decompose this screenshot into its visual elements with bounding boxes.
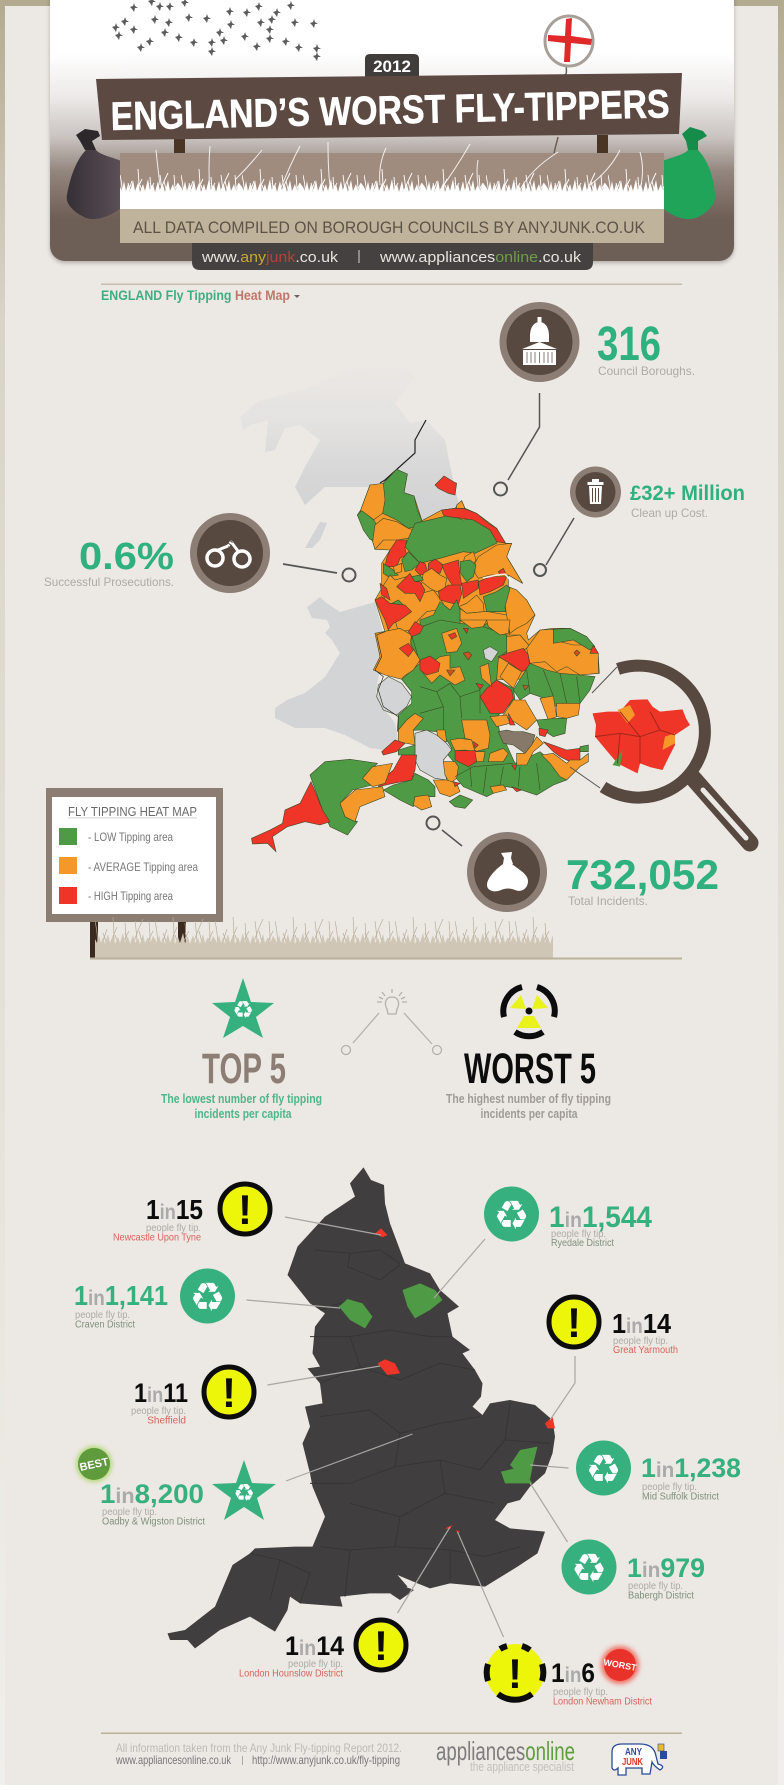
badge: best: BEST [79, 1456, 110, 1474]
callout: London Newham District: London Newham District [553, 1696, 652, 1708]
badge: worst [601, 1646, 639, 1684]
legend posts [90, 922, 186, 958]
stat: clean up cost: £32+ Million [630, 482, 745, 505]
callout: Mid Suffolk District: 1in1,238 [641, 1453, 741, 1483]
top 5 heading: incidents per capita [194, 1106, 292, 1121]
legend board: FLY TIPPING HEAT MAP [68, 804, 197, 819]
stat: total incidents: Total Incidents. [568, 894, 648, 908]
top 5 heading: TOP 5 [202, 1045, 286, 1093]
logo: appliancesonline: appliancesonline [436, 1736, 575, 1766]
callout: Mid Suffolk District [576, 1440, 741, 1502]
dark map of England [168, 1167, 555, 1648]
bag: black [67, 129, 124, 219]
lightbulb connector [342, 989, 442, 1054]
callout: London Hounslow District: people fly tip. [288, 1659, 343, 1670]
callout: Newcastle Upon Tyne: people fly tip. [146, 1223, 201, 1234]
icon: warning [356, 1620, 406, 1670]
stat: successful prosecutions: Successful Prosecutions. [44, 575, 174, 589]
icon: rubbish sack [487, 852, 528, 891]
grass panel [120, 142, 664, 209]
website bar: www.anyjunk.co.uk [201, 249, 339, 266]
callout: Craven District: Craven District [75, 1320, 135, 1330]
callout: Babergh District [562, 1540, 705, 1602]
callout: London Hounslow District: London Hounslow District [239, 1668, 343, 1680]
grass strip and divider [90, 915, 682, 960]
callout: Great Yarmouth: people fly tip. [613, 1336, 668, 1347]
stat: clean up cost [534, 466, 745, 576]
icon: radiation symbol [503, 987, 555, 1036]
icon: recycling: ♻ [190, 1275, 225, 1321]
highlighted districts [339, 1228, 555, 1533]
callout: Oadby and Wigston District [76, 1446, 276, 1528]
callout: Oadby and Wigston District: 1in8,200 [100, 1479, 204, 1509]
stat: clean up cost: Clean up Cost. [631, 506, 708, 520]
callout: Oadby and Wigston District: Oadby & Wigston District [102, 1516, 205, 1528]
magnifying glass with London detail [570, 666, 750, 843]
callout: Craven District: people fly tip. [75, 1310, 130, 1321]
callout: London Newham District [486, 1644, 652, 1708]
logo: any junk elephant [612, 1744, 667, 1775]
icon: bin [588, 479, 604, 504]
stat: 316 council boroughs: 316 [597, 318, 661, 371]
logo: appliancesonline: the appliance specialist [470, 1759, 574, 1774]
callout: Newcastle Upon Tyne: Newcastle Upon Tyne [113, 1232, 201, 1244]
callout: London Hounslow District [239, 1620, 406, 1680]
top 5 heading: The lowest number of fly tipping [161, 1091, 322, 1106]
callout: Ryedale District: people fly tip. [551, 1229, 606, 1240]
callout: London Hounslow District: 1in14 [285, 1631, 344, 1661]
website bar: www.appliances online.co.uk [379, 249, 582, 266]
year tab: 2012 [373, 57, 411, 76]
icon: warning with radiation ring: ! [508, 1650, 522, 1697]
bag: green [660, 127, 715, 219]
icon: star: ♻ [233, 1479, 255, 1507]
callout: Craven District [74, 1268, 235, 1330]
icon: warning: ! [567, 1299, 581, 1346]
callout: Mid Suffolk District: people fly tip. [642, 1482, 697, 1493]
callout: London Newham District: 1in6 [551, 1658, 595, 1688]
tagline band [120, 209, 664, 243]
map: south west England districts [252, 759, 392, 852]
map: midlands and southern England districts [373, 620, 598, 810]
icon: recycling [180, 1268, 235, 1324]
icon: warning [220, 1184, 270, 1234]
icon: handcuffs [207, 541, 250, 567]
icon: domed council building [522, 317, 557, 365]
stat: 316 council boroughs: Council Boroughs. [598, 364, 695, 378]
icon: warning: ! [374, 1622, 388, 1669]
map: grey surrounding nations [240, 363, 470, 750]
icon: warning: ! [238, 1186, 252, 1233]
callout: London Newham District: people fly tip. [553, 1687, 608, 1698]
footer source note: All information taken from the Any Junk Fly-tipping Report 2012. [116, 1741, 402, 1755]
icon: green star: ♻ [232, 996, 254, 1024]
logo: any junk elephant: ANY [625, 1747, 642, 1758]
map: white Humber estuary [483, 574, 512, 582]
icon: recycling: ♻ [586, 1447, 621, 1493]
icon: green star [212, 978, 274, 1038]
callout: Craven District: 1in1,141 [74, 1280, 168, 1311]
badge: worst: WORST [603, 1657, 638, 1673]
icon: recycling [484, 1186, 539, 1242]
callout: Ryedale District: Ryedale District [551, 1238, 614, 1249]
stat: 316 council boroughs [494, 302, 695, 496]
icon: star [212, 1460, 276, 1520]
heat map of Great Britain [240, 363, 599, 852]
stat: total incidents [426, 816, 719, 912]
callout: Mid Suffolk District: Mid Suffolk District [642, 1492, 719, 1502]
legend board [46, 788, 223, 958]
map: northern England districts [357, 469, 599, 680]
callout: Great Yarmouth [549, 1297, 678, 1356]
callout: Ryedale District [484, 1186, 652, 1249]
panel: header [50, 0, 734, 270]
title sign: ENGLAND’S WORST FLY-TIPPERS [110, 82, 670, 139]
icon: warning: ! [222, 1369, 236, 1416]
top 5 heading [161, 978, 322, 1121]
footer source note: http://www.anyjunk.co.uk/fly-tipping [252, 1753, 400, 1767]
worst 5 heading [446, 987, 611, 1121]
birds flock [112, 0, 321, 61]
sign posts [174, 135, 608, 154]
stat: successful prosecutions [44, 513, 356, 593]
flag of England on a pole [545, 16, 593, 156]
legend board: - AVERAGE Tipping area [88, 860, 198, 874]
icon: recycling: ♻ [494, 1193, 529, 1239]
divider and section heading: ENGLAND Fly Tipping Heat Map [101, 288, 290, 303]
callout: Sheffield: 1in11 [134, 1378, 188, 1408]
icon: recycling [562, 1540, 616, 1594]
callout: Babergh District: people fly tip. [628, 1581, 683, 1592]
footer source note [115, 1741, 402, 1767]
worst 5 heading: WORST 5 [464, 1045, 596, 1093]
callout: Great Yarmouth: Great Yarmouth [613, 1345, 678, 1356]
callout: Babergh District: 1in979 [627, 1553, 705, 1583]
callout: Newcastle Upon Tyne: 1in15 [146, 1194, 203, 1225]
callout: Sheffield: people fly tip. [131, 1406, 186, 1417]
tagline band: ALL DATA COMPILED ON BOROUGH COUNCILS BY ANYJUNK.CO.UK [133, 219, 645, 237]
callout: Great Yarmouth: 1in14 [612, 1308, 671, 1339]
divider and section heading [101, 284, 682, 303]
callout: Babergh District: Babergh District [628, 1590, 694, 1602]
callout: Oadby and Wigston District: people fly tip. [102, 1507, 157, 1518]
London boroughs [592, 699, 690, 773]
stat: successful prosecutions: 0.6% [79, 536, 174, 578]
footer source note: www.appliancesonline.co.uk [115, 1753, 232, 1767]
worst 5 heading: The highest number of fly tipping [446, 1091, 611, 1106]
callout: Newcastle Upon Tyne [113, 1184, 270, 1244]
pointer lines for district callouts [246, 1217, 575, 1637]
worst 5 heading: incidents per capita [480, 1106, 578, 1121]
logo: any junk elephant: JUNK [622, 1757, 644, 1768]
callout: Sheffield [131, 1367, 254, 1426]
icon: recycling [576, 1440, 631, 1496]
website bar [192, 243, 593, 270]
callout: Ryedale District: 1in1,544 [549, 1201, 652, 1234]
stat: total incidents: 732,052 [566, 851, 719, 898]
callout: Sheffield: Sheffield [147, 1416, 186, 1426]
legend board: - LOW Tipping area [88, 830, 173, 844]
year tab [365, 54, 419, 78]
badge: best [76, 1446, 112, 1482]
icon: warning with radiation ring [486, 1644, 544, 1702]
footer [101, 1732, 682, 1775]
icon: recycling: ♻ [571, 1546, 607, 1592]
legend board: - HIGH Tipping area [88, 889, 173, 903]
